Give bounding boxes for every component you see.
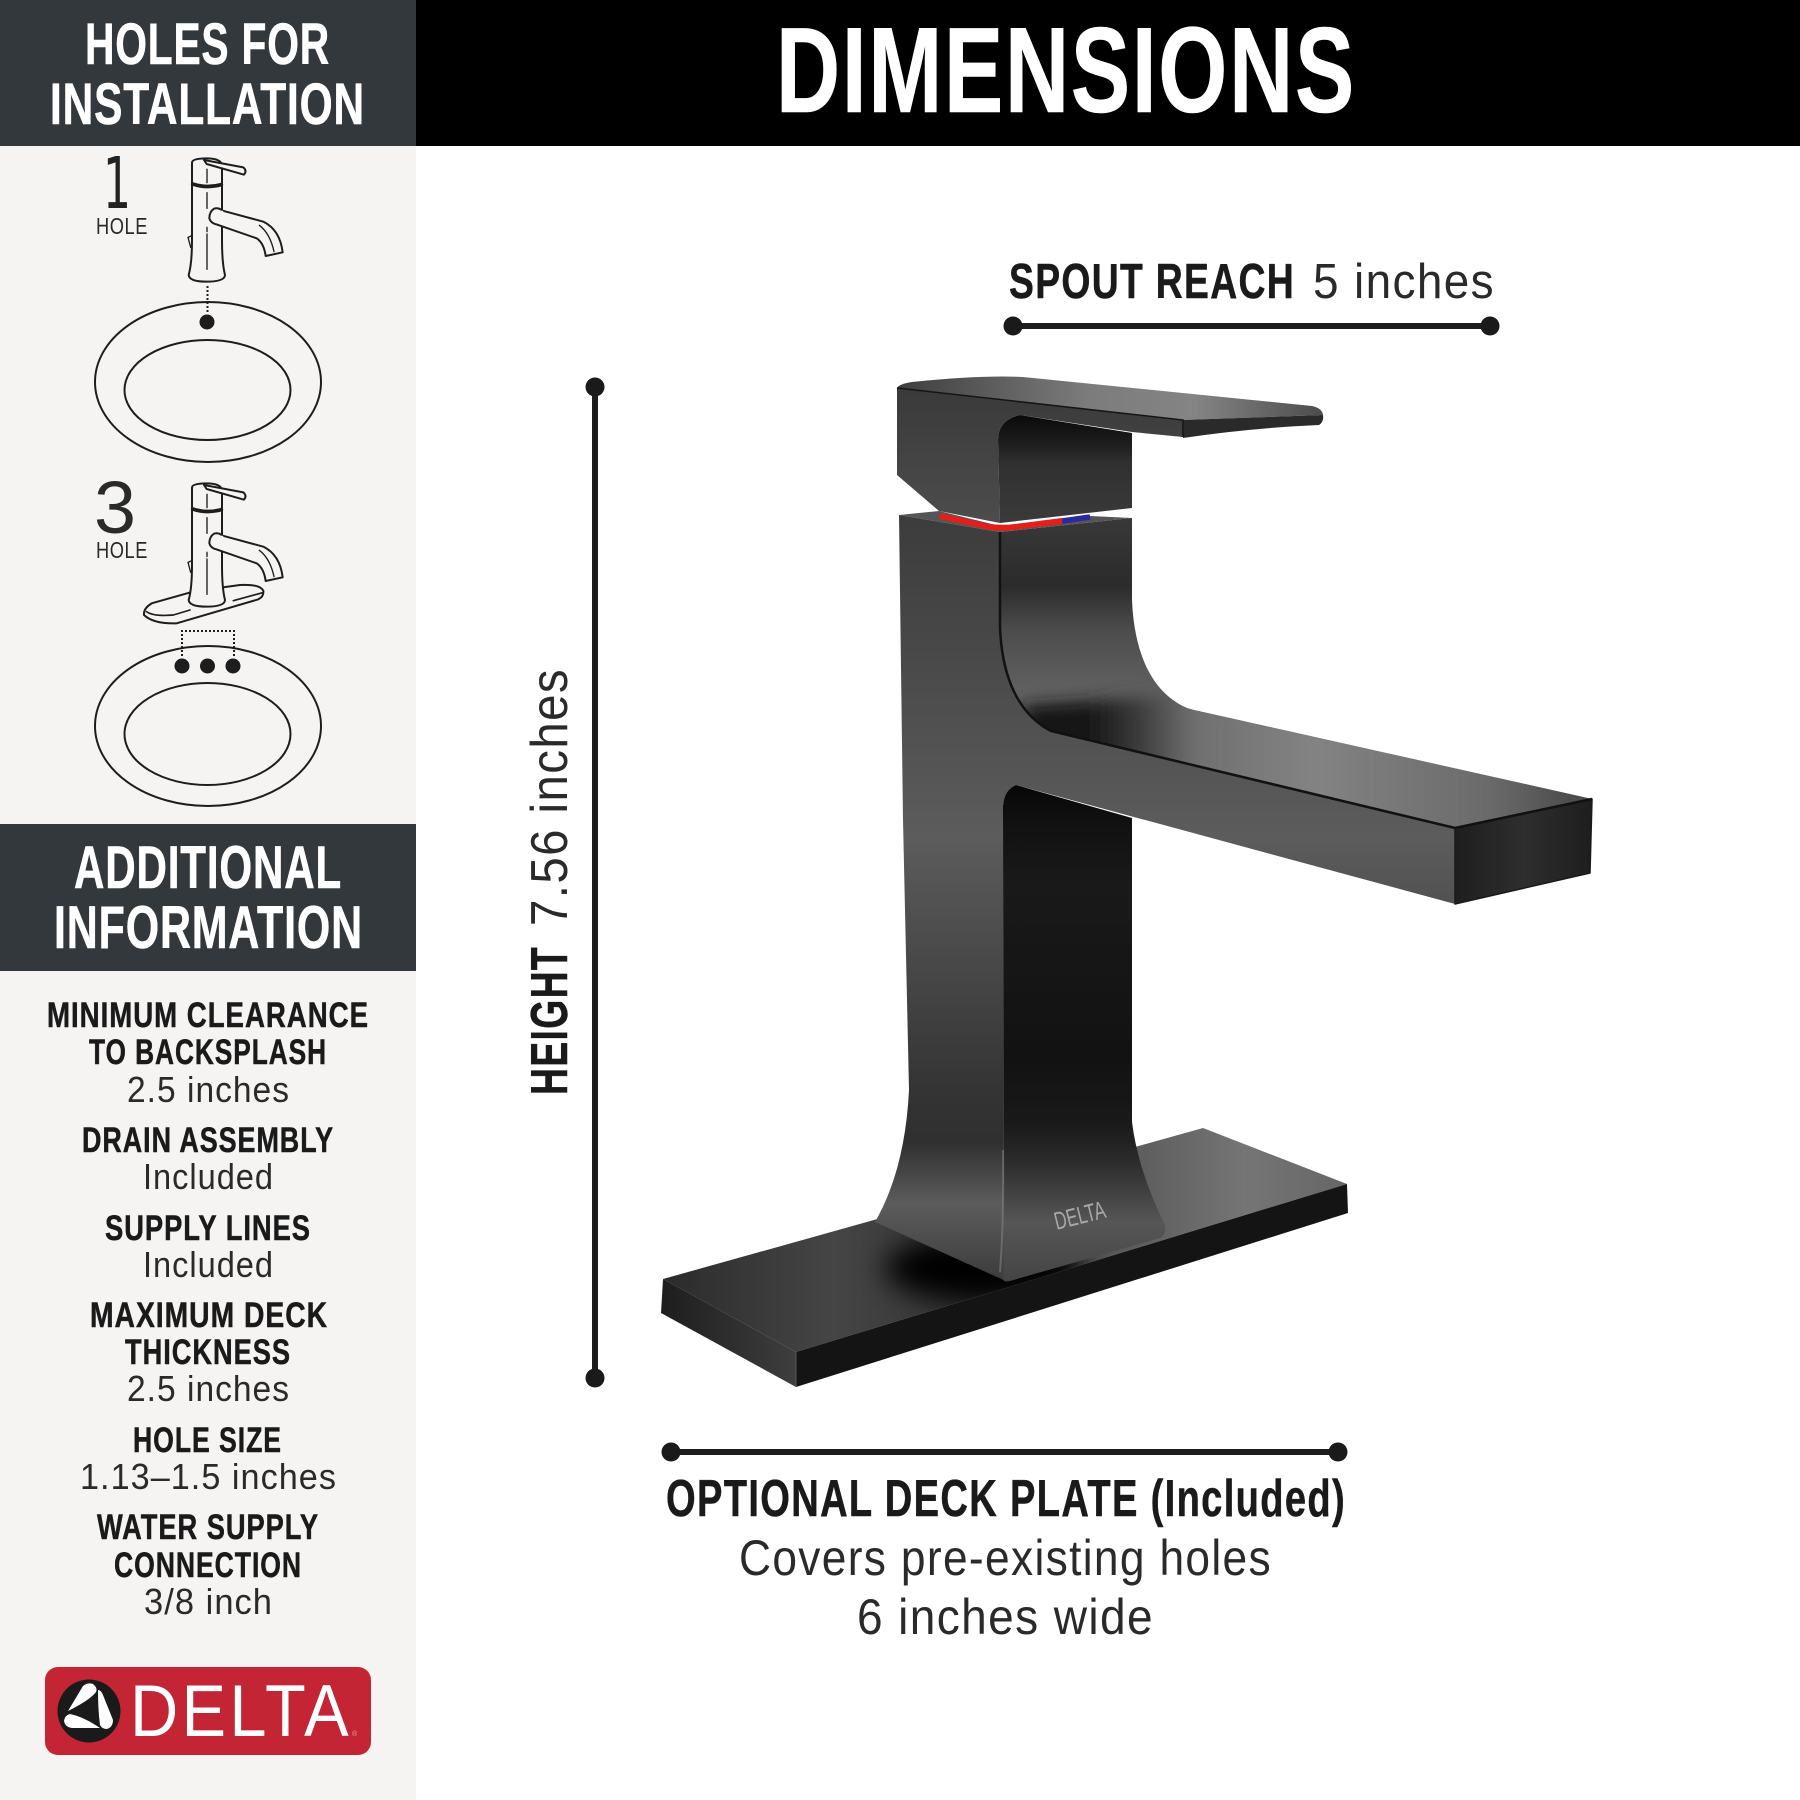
icon: deck plate line drawing [144, 585, 263, 623]
item: hole size [80, 1421, 337, 1497]
item: drain assembly [82, 1121, 334, 1197]
label: 3 hole: HOLE [96, 537, 148, 563]
icon: faucet line drawing [188, 483, 283, 607]
icon: sink with one hole [95, 286, 321, 462]
faucet side face and spout side [875, 515, 1455, 1280]
diagram: one hole installation [95, 142, 321, 462]
faucet neck and spout top [998, 518, 1592, 829]
item: water supply connection: 3/8 inch [144, 1581, 273, 1622]
heading: additional information: ADDITIONAL [74, 834, 342, 901]
handle [897, 377, 1323, 523]
dimension: height [521, 378, 604, 1388]
item: maximum deck thickness [90, 1296, 328, 1409]
label: height: 7.56 inches [521, 668, 579, 926]
item: water supply connection [97, 1508, 319, 1622]
item: supply lines: SUPPLY LINES [105, 1209, 311, 1248]
product: faucet with deck plate [661, 377, 1640, 1387]
item: water supply connection: CONNECTION [114, 1546, 302, 1585]
item: maximum deck thickness: THICKNESS [125, 1333, 291, 1372]
item: minimum clearance: 2.5 inches [127, 1069, 290, 1110]
title: DIMENSIONS [776, 2, 1356, 138]
logo: delta: DELTA [130, 1671, 352, 1752]
list: additional information items [47, 996, 369, 1622]
text: deck plate description: Covers pre-existing holes [739, 1530, 1272, 1586]
diagram: three hole installation [94, 466, 321, 806]
icon: faucet line drawing [188, 158, 283, 282]
item: supply lines [105, 1209, 311, 1285]
faucet front face and base [1000, 785, 1165, 1281]
label: height [521, 668, 579, 1095]
heading: holes for installation [0, 0, 416, 146]
item: minimum clearance: TO BACKSPLASH [89, 1033, 327, 1072]
panel: left sidebar background [0, 146, 416, 1800]
engraved delta mark: DELTA [1051, 1196, 1109, 1236]
icon: sink with three holes [95, 631, 321, 806]
logo: delta: ® [352, 1730, 358, 1738]
item: minimum clearance: MINIMUM CLEARANCE [47, 996, 369, 1035]
item: hole size: HOLE SIZE [133, 1421, 282, 1460]
item: maximum deck thickness: MAXIMUM DECK [90, 1296, 328, 1335]
label: 1 hole: 1 [103, 142, 131, 225]
label: spout reach: SPOUT REACH [1009, 255, 1295, 309]
text: deck plate description: 6 inches wide [857, 1589, 1154, 1645]
dimension: optional deck plate [662, 1442, 1348, 1645]
deck plate [661, 1128, 1348, 1387]
item: drain assembly: DRAIN ASSEMBLY [82, 1121, 334, 1160]
item: hole size: 1.13–1.5 inches [80, 1456, 337, 1497]
heading: additional information: INFORMATION [54, 894, 363, 961]
heading: holes for installation: INSTALLATION [50, 72, 365, 137]
label: 1 hole: HOLE [96, 213, 148, 239]
arrow: spout reach line [1004, 316, 1500, 336]
body top and temperature band [899, 511, 1132, 532]
arrow: height line [586, 378, 604, 1388]
item: maximum deck thickness: 2.5 inches [127, 1368, 290, 1409]
dimension: spout reach [1004, 255, 1500, 336]
item: water supply connection: WATER SUPPLY [97, 1508, 319, 1547]
label: 3 hole [94, 466, 148, 563]
item: supply lines: Included [143, 1244, 274, 1285]
spout end face [1455, 799, 1592, 904]
heading: holes for installation: HOLES FOR [85, 12, 330, 77]
text: deck plate description: OPTIONAL DECK PLATE (Included) [666, 1470, 1346, 1528]
item: minimum clearance [47, 996, 369, 1110]
arrow: deck plate width line [662, 1442, 1348, 1462]
label: height: HEIGHT [521, 946, 579, 1095]
header bar: dimensions [416, 0, 1800, 146]
item: drain assembly: Included [143, 1156, 274, 1197]
label: 3 hole: 3 [94, 466, 136, 549]
heading: additional information [0, 824, 416, 971]
label: spout reach: 5 inches [1313, 255, 1495, 309]
logo: delta [45, 1667, 371, 1755]
text: deck plate description [666, 1470, 1346, 1645]
